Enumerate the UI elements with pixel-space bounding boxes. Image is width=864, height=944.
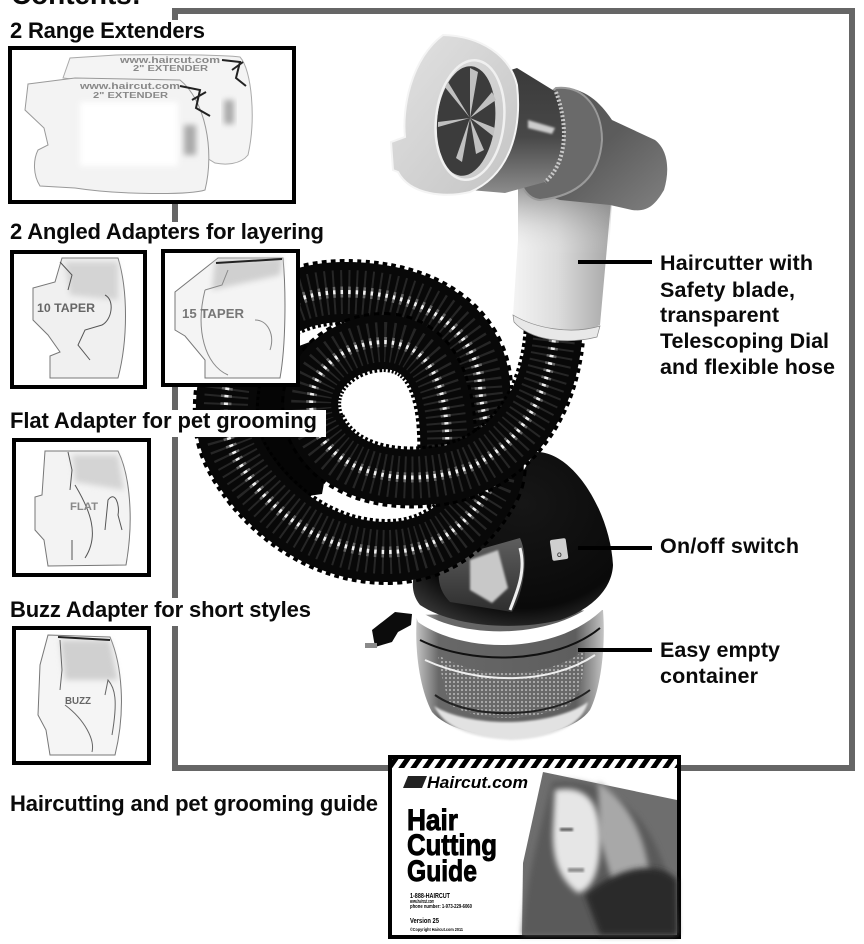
- embossed extender rear: 2" EXTENDER: [133, 64, 208, 73]
- top dark edge: [58, 637, 110, 640]
- collar ring: [515, 88, 602, 200]
- front highlight: [80, 102, 178, 166]
- on/off rocker switch: [550, 538, 568, 561]
- power plug: [365, 612, 412, 648]
- label background: range extenders: [0, 20, 210, 46]
- title line 1: Hair: [407, 804, 458, 837]
- adapter shading: [72, 455, 124, 490]
- callout: on/off switch: [578, 534, 799, 558]
- adapter body: [35, 451, 130, 566]
- brand logo: [403, 776, 427, 788]
- top dark edge: [216, 259, 282, 263]
- callout line 5: and flexible hose: [660, 355, 835, 379]
- panel: 10 taper adapter: [12, 252, 145, 387]
- phone number line: phone number: 1-973-229-6060: [410, 904, 472, 910]
- guide title: [407, 804, 497, 888]
- container base: [412, 590, 610, 740]
- dark hair lower right: [585, 868, 677, 935]
- panel: 15 taper adapter: [163, 251, 298, 385]
- callout line 3: transparent: [660, 303, 779, 327]
- embossed extender front: 2" EXTENDER: [93, 91, 168, 100]
- clear bottom: [434, 702, 588, 740]
- embossed text rear: www.haircut.com: [119, 55, 220, 65]
- taper label: 15 TAPER: [182, 306, 245, 321]
- handle top shading: [518, 180, 613, 255]
- callout: haircutter: [578, 251, 835, 379]
- hazard stripe band: [392, 759, 677, 768]
- lower chrome band: [425, 655, 595, 678]
- hose: flexible corrugated tube: [226, 292, 555, 552]
- clip front: [180, 86, 210, 116]
- leader line: [578, 648, 652, 652]
- panel: flat adapter: [14, 440, 149, 575]
- cover photo background: [522, 772, 677, 935]
- adapter shading: [65, 262, 118, 300]
- white rim: [412, 590, 610, 645]
- phone line: 1-888-HAIRCUT: [410, 891, 450, 900]
- clip rear: [222, 60, 246, 86]
- hose inner loop: [311, 342, 447, 460]
- handle base band: [513, 315, 600, 341]
- label: Flat Adapter for pet grooming: Flat Adapter for pet grooming: [10, 408, 317, 433]
- label background: flat adapter: [0, 410, 326, 437]
- panel: hair cutting guide booklet: [390, 757, 679, 937]
- callout line 2: Safety blade,: [660, 278, 795, 302]
- window highlight: [470, 550, 508, 603]
- adapter details: [60, 262, 111, 360]
- rear extender: [63, 55, 252, 164]
- motor dome: [413, 452, 613, 626]
- version: Version 25: [410, 916, 439, 925]
- hose front strand from handle: [315, 325, 555, 477]
- panel: buzz adapter: [14, 628, 149, 763]
- copyright: ©Copyright Haircut.com 2011: [410, 926, 463, 932]
- rear shading bars: [224, 100, 234, 124]
- body rear: [530, 87, 667, 210]
- adapter shading: [60, 640, 118, 680]
- window chrome strip: [510, 548, 522, 610]
- dome window: [439, 538, 525, 612]
- transparent nozzle: [391, 35, 518, 195]
- title line 2: Cutting: [407, 829, 497, 862]
- adapter body: [38, 635, 121, 755]
- hose overlap shadow filling gaps between strands: [235, 340, 332, 500]
- title line 3: Guide: [407, 855, 477, 888]
- front extender: [25, 78, 209, 194]
- callout line 4: Telescoping Dial: [660, 329, 829, 353]
- adapter body: [33, 258, 126, 378]
- bottom chrome band: [435, 690, 590, 713]
- adapter body: [175, 258, 285, 378]
- adapter details: [60, 640, 115, 752]
- on/off rocker switch: O: [557, 553, 562, 559]
- hair: [522, 781, 677, 935]
- hose outer loop: [226, 292, 494, 552]
- face: [553, 789, 600, 893]
- callout line 2: container: [660, 664, 759, 688]
- ridged dial edge: [545, 92, 564, 182]
- haircutter unit: [391, 35, 667, 341]
- label: 2 Angled Adapters for layering: 2 Angled Adapters for layering: [10, 219, 324, 244]
- handle: [513, 180, 613, 332]
- label: Haircutting and pet grooming guide: Haircutting and pet grooming guide: [10, 791, 378, 816]
- website line: www.haircut.com: [409, 899, 434, 905]
- label: Buzz Adapter for short styles: Buzz Adapter for short styles: [10, 597, 311, 622]
- callout line 1: Haircutter with: [660, 251, 813, 275]
- callout: easy empty container: [578, 638, 780, 688]
- label: 2 Range Extenders: 2 Range Extenders: [10, 18, 205, 43]
- leader line: [578, 260, 652, 264]
- adapter details: [68, 452, 122, 560]
- brand name: Haircut.com: [427, 773, 528, 792]
- callout line 1: Easy empty: [660, 638, 780, 662]
- lips: [568, 868, 584, 872]
- container body: [416, 610, 604, 737]
- taper label: 10 TAPER: [37, 301, 95, 315]
- buzz label: BUZZ: [65, 696, 91, 707]
- telescoping barrel: [470, 68, 564, 193]
- flat label: FLAT: [70, 501, 98, 513]
- adapter details: [201, 270, 272, 375]
- mesh filter: [438, 650, 585, 718]
- shading bars: [184, 125, 196, 155]
- eye: [560, 828, 573, 831]
- fan blades: [438, 68, 496, 162]
- light hair strands: [598, 782, 650, 900]
- panel: range extenders: [10, 48, 294, 202]
- nozzle inner rim: [430, 57, 510, 183]
- fan opening: [431, 63, 501, 179]
- frame around main product: [175, 11, 852, 768]
- callout text: On/off switch: [660, 534, 799, 558]
- chrome band: [420, 628, 600, 657]
- adapter shading: [212, 258, 283, 290]
- label background: angled adapters: [0, 222, 330, 249]
- highlight on barrel: [528, 120, 555, 134]
- leader line: [578, 546, 652, 550]
- embossed text front: www.haircut.com: [79, 81, 180, 91]
- label background: buzz adapter: [0, 598, 320, 626]
